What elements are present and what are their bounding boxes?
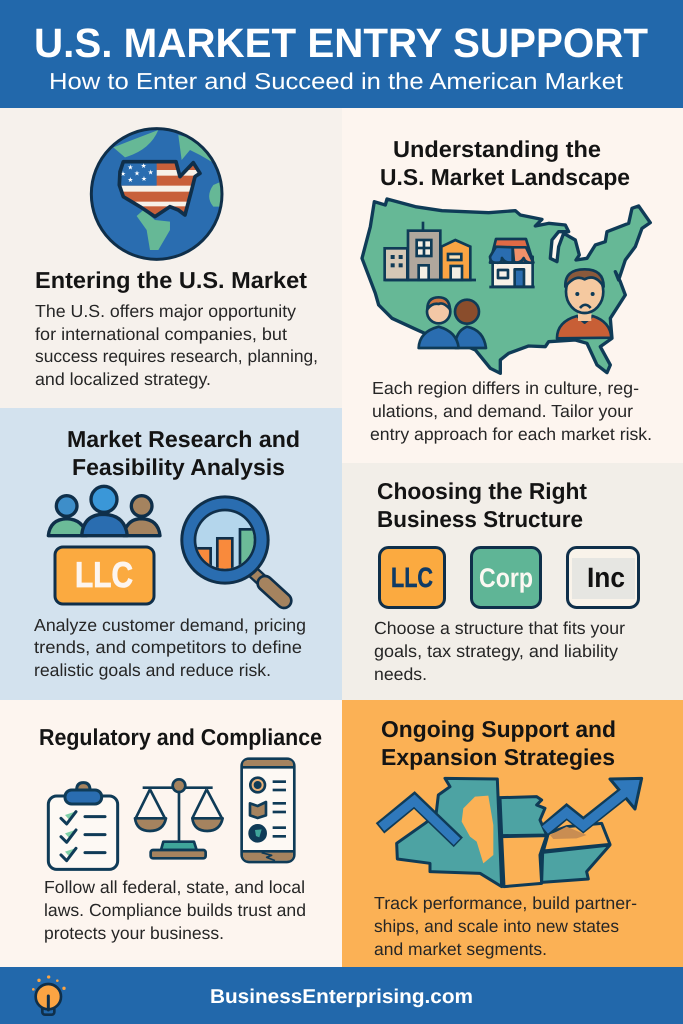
icon: Corp tile: Corp [479, 563, 533, 593]
panel: understanding the U.S. market landscape [342, 108, 683, 463]
body text: for international companies, but [35, 324, 287, 344]
heading: Expansion Strategies [381, 744, 615, 770]
icon: two people [419, 297, 486, 348]
panel: choosing the right business structure [342, 463, 683, 700]
icon: globe with U.S. flag map: ★ [134, 170, 140, 177]
body text: Track performance, build partner- [374, 893, 637, 913]
heading: Business Structure [377, 506, 583, 532]
icon: LLC badge [55, 547, 154, 604]
heading: Entering the U.S. Market [35, 267, 307, 293]
body text: Each region differs in culture, reg- [372, 378, 639, 398]
icon: magnifying glass with bar chart [180, 495, 284, 601]
body text [35, 301, 318, 389]
illustration: state map with growth arrow [380, 778, 642, 887]
body text: The U.S. offers major opportunity [35, 301, 296, 321]
subtitle: How to Enter and Succeed in the American Market [49, 68, 624, 94]
body text: laws. Compliance builds trust and [44, 900, 306, 920]
heading [377, 478, 587, 532]
icon: person with concerned face [557, 269, 611, 338]
icon: LLC tile [380, 548, 444, 608]
body text: needs. [374, 664, 427, 684]
heading [381, 716, 616, 770]
icon: LLC tile: LLC [391, 562, 433, 593]
heading: U.S. Market Landscape [380, 164, 630, 190]
heading [380, 136, 630, 190]
icon: city buildings [385, 222, 476, 280]
body text: and market segments. [374, 939, 547, 959]
icon: scales of justice [135, 779, 223, 858]
footer bar [0, 967, 683, 1024]
panel: market research and feasibility analysis [0, 408, 342, 700]
header banner [0, 0, 683, 108]
body text: goals, tax strategy, and liability [374, 641, 618, 661]
body text: protects your business. [44, 923, 224, 943]
icon: globe with U.S. flag map [91, 129, 227, 259]
body text: success requires research, planning, [35, 346, 318, 366]
heading: Choosing the Right [377, 478, 587, 504]
body text: Follow all federal, state, and local [44, 877, 305, 897]
icon: light bulb [32, 975, 66, 1015]
body text [44, 877, 306, 943]
body text: Choose a structure that fits your [374, 618, 625, 638]
body text: realistic goals and reduce risk. [34, 660, 271, 680]
icon: storefront [489, 239, 535, 287]
body text [374, 618, 625, 684]
body text [370, 378, 652, 444]
illustration: U.S. map with buildings and people [362, 199, 650, 373]
heading: Market Research and [67, 426, 300, 452]
icon: group of three people [48, 486, 160, 536]
panel: ongoing support and expansion strategies [342, 700, 683, 967]
heading: Understanding the [393, 136, 601, 162]
panel: entering the U.S. market [0, 108, 342, 408]
heading: Ongoing Support and [381, 716, 616, 742]
body text [34, 615, 306, 680]
body text: ulations, and demand. Tailor your [372, 401, 633, 421]
heading: Regulatory and Compliance [39, 724, 322, 750]
body text [374, 893, 637, 959]
panel: regulatory and compliance [0, 700, 342, 967]
icon: Inc tile [568, 548, 638, 608]
icon: globe with U.S. flag map: ★ [127, 164, 133, 171]
body text: Analyze customer demand, pricing [34, 615, 306, 635]
body text: and localized strategy. [35, 369, 211, 389]
title: U.S. MARKET ENTRY SUPPORT [34, 20, 648, 66]
icon: smartphone with app list [242, 759, 294, 862]
icon: globe with U.S. flag map: ★ [148, 169, 154, 176]
body text: trends, and competitors to define [34, 637, 302, 657]
arrow: growth trend [545, 778, 642, 830]
icon: globe with U.S. flag map: ★ [141, 175, 147, 183]
heading [67, 426, 300, 480]
icon: Corp tile [472, 548, 540, 608]
icon: Inc tile: Inc [587, 562, 625, 593]
icon: globe with U.S. flag map: ★ [120, 170, 126, 178]
website address: BusinessEnterprising.com [210, 986, 473, 1008]
icon: globe with U.S. flag map: ★ [141, 162, 147, 170]
body text: entry approach for each market risk. [370, 424, 652, 444]
body text: ships, and scale into new states [374, 916, 619, 936]
icon: globe with U.S. flag map: ★ [127, 176, 133, 184]
icon: clipboard checklist [48, 783, 118, 869]
icon: LLC badge: LLC [75, 554, 133, 595]
arrow: decline segment [380, 800, 458, 842]
heading: Feasibility Analysis [72, 454, 285, 480]
